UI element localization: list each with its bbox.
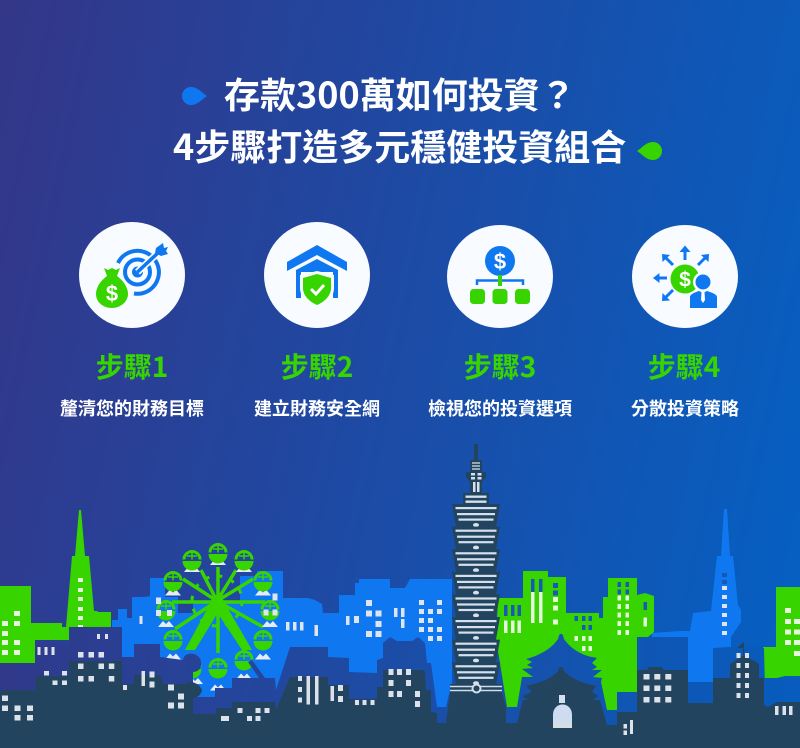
step 1: circle icon target and money bag: $ (106, 281, 118, 306)
step 3 description: 檢視您的投資選項 (428, 395, 572, 421)
back layer: blue spire right (652, 509, 741, 690)
title line 1: 存款300萬如何投資？ (224, 67, 576, 119)
step 4 description: 分散投資策略 (631, 395, 739, 421)
step 1 heading: 步驟1 (96, 346, 168, 386)
city skyline illustration (0, 444, 800, 748)
icon: blue drop (182, 87, 207, 105)
step 3: circle icon dollar hierarchy: $ (494, 249, 506, 274)
step 2 description: 建立財務安全網 (254, 395, 380, 421)
step 4: circle icon diversified arrows and advisor (632, 225, 738, 328)
green buildings and spire left (0, 510, 111, 663)
middle layer silhouette (0, 627, 800, 748)
step 1: circle icon target and money bag (79, 222, 185, 328)
blue panes on spire (722, 573, 727, 584)
Taipei 101 tower (450, 444, 502, 694)
step 2 heading: 步驟2 (281, 346, 353, 386)
small leg of wheel in shadow (248, 660, 265, 678)
windows on dark and middle layers (2, 634, 792, 735)
windows on blue buildings (140, 586, 727, 641)
dark foreground silhouette (0, 655, 800, 748)
temple door (553, 695, 572, 728)
step 2: circle icon house and shield (264, 222, 370, 328)
title line 2: 4步驟打造多元穩健投資組合 (173, 119, 626, 171)
step 3: circle icon dollar hierarchy (447, 225, 553, 328)
windows on green buildings (2, 578, 800, 656)
back layer: blue buildings left (112, 571, 452, 730)
step 3 heading: 步驟3 (464, 346, 536, 386)
step 1 description: 釐清您的財務目標 (60, 395, 204, 421)
ferris wheel (156, 544, 280, 690)
flag (737, 642, 744, 655)
step 4 heading: 步驟4 (648, 346, 720, 386)
step 4: circle icon diversified arrows and advisor: $ (679, 268, 691, 292)
dark panes on green buildings (504, 579, 647, 630)
green buildings centre (496, 571, 654, 720)
icon: green drop (637, 142, 662, 160)
green building right (760, 587, 800, 687)
